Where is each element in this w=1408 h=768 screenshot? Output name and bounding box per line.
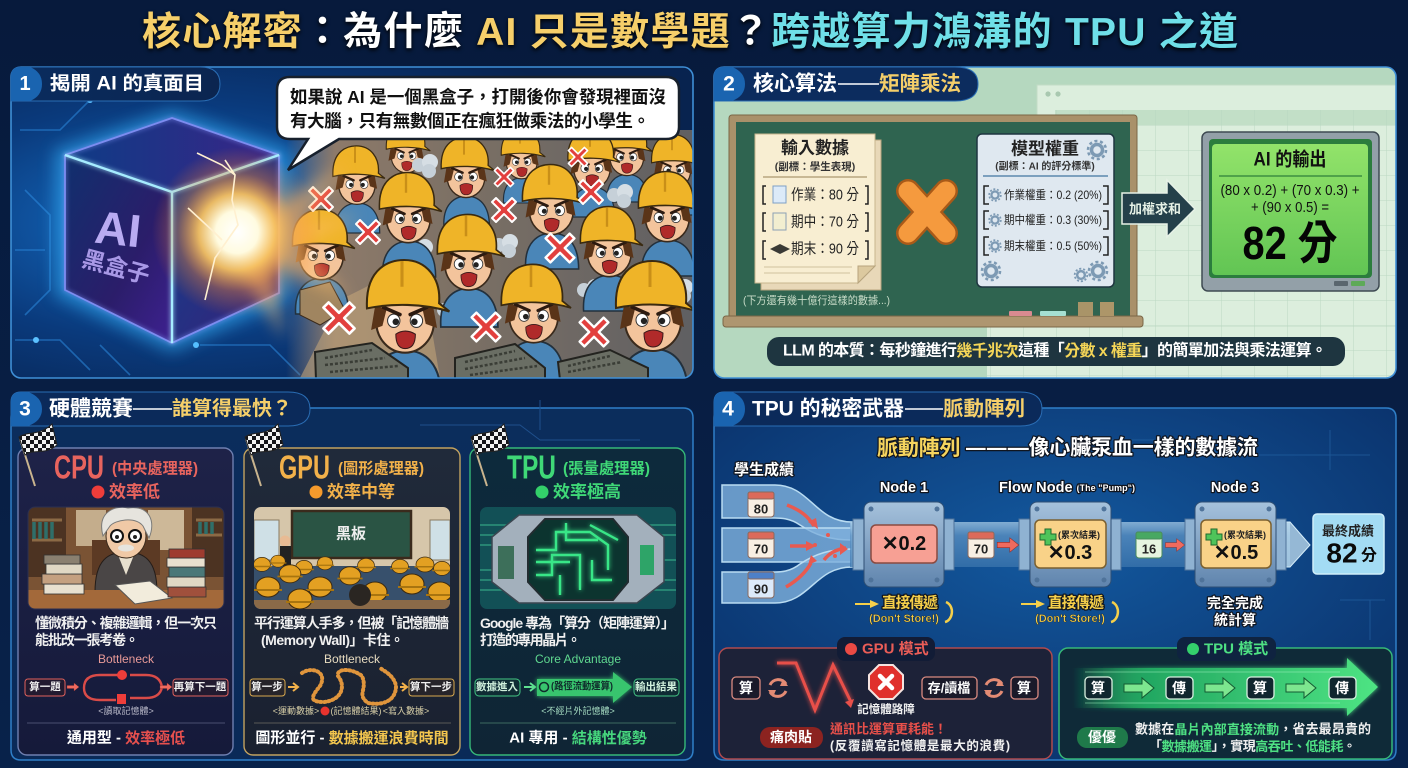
heading: section 3: 誰算得最快？ (172, 396, 292, 420)
card: input data: (副標：學生表現) (775, 160, 855, 173)
card: CPU: 能批改一張考卷。 (35, 632, 139, 648)
card: TPU: 效率極高 (553, 482, 621, 502)
card: GPU: 圖形並行 - 數據搬運浪費時間 (255, 728, 449, 746)
node 1: ✕0.2 (882, 533, 926, 555)
card: model weights: 作業權重：0.2 (20%) (1004, 188, 1102, 202)
card: CPU: 效率低 (109, 482, 160, 502)
chalkboard (723, 115, 1143, 327)
card: CPU: 懂微積分、複雜邏輯，但一次只 (35, 615, 217, 631)
node 1: Node 1 (880, 480, 928, 496)
card: CPU: Bottleneck (98, 652, 155, 666)
flow: CPU bottleneck loop: 算一題 (29, 680, 61, 693)
panel: GPU mode: 通訊比運算更耗能！ (830, 722, 947, 736)
card: model weights (977, 134, 1114, 287)
note: direct pass 1: 直接傳遞 (882, 594, 938, 612)
heading: section 1: 揭開 AI 的真面目 (50, 72, 204, 94)
result box: 82 (1326, 538, 1358, 568)
card: GPU: Bottleneck (324, 652, 381, 666)
node 3: (累次結果) (1224, 529, 1266, 540)
card: GPU: GPU (279, 448, 330, 486)
monitor: AI output (1202, 132, 1379, 291)
chalkboard: (下方還有幾十億行這樣的數據...) (743, 293, 890, 307)
panel 3: hardware race (11, 392, 693, 760)
illustration: TPU chip (480, 507, 676, 609)
flow: GPU bottleneck road: 算下一步 (410, 680, 452, 693)
speech bubble (277, 77, 679, 170)
note: direct pass 1: (Don't Store!) (869, 613, 939, 625)
flow: GPU bottleneck road: <寫入數據> (383, 705, 429, 716)
panel 2: core algorithm (714, 67, 1402, 380)
title: 核心解密：為什麼 AI 只是數學題？跨越算力鴻溝的 TPU 之道 (142, 10, 1238, 54)
connecting pipes: 70 (974, 542, 988, 556)
input pipes: 80 (754, 502, 768, 516)
icon: multiply sign (908, 191, 946, 233)
panel: GPU mode: 算 (1017, 680, 1031, 696)
arrow: weighted sum: 加權求和 (1129, 202, 1181, 216)
heading: section 1 (11, 67, 220, 101)
node 3 (1195, 480, 1276, 587)
glow behind cube (55, 110, 290, 352)
heading: section 2: 2 (723, 72, 735, 96)
card: input data (755, 134, 881, 290)
panel: GPU mode (719, 637, 1052, 759)
glow burst (152, 147, 360, 340)
flow: TPU core advantage (475, 672, 679, 716)
heading: section 3: 硬體競賽 (49, 396, 133, 420)
monitor: AI output: (80 x 0.2) + (70 x 0.3) + (1220, 183, 1360, 199)
panel: TPU mode: TPU 模式 (1204, 640, 1268, 658)
card: model weights: 期末權重：0.5 (50%) (1004, 239, 1102, 253)
illustration: professor (28, 507, 224, 610)
note: direct pass 1 (855, 594, 952, 625)
icon: AI black box cube: AI (92, 201, 144, 257)
heading: section 4: TPU 的秘密武器 (752, 396, 904, 420)
note: direct pass 2: 直接傳遞 (1048, 594, 1104, 612)
input pipes: 90 (754, 582, 768, 596)
panel: TPU mode: 算 (1253, 680, 1267, 696)
node 2: (累次結果) (1058, 529, 1100, 540)
panel 1: reveal the AI black box (11, 67, 701, 398)
heading: section 2: 核心算法 (753, 72, 837, 96)
flow: CPU bottleneck loop: <讀取記憶體> (98, 705, 154, 716)
node 3: ✕0.5 (1214, 542, 1258, 564)
icon: AI black box cube: 黑盒子 (79, 246, 153, 288)
panel: GPU mode: 記憶體路障 (857, 702, 915, 716)
node 2: ✕0.3 (1048, 542, 1092, 564)
connecting pipes: 16 (1142, 542, 1156, 556)
panel: TPU mode: 數據在晶片內部直接流動，省去最昂貴的 (1135, 722, 1371, 736)
heading: section 1: 1 (19, 73, 31, 95)
flow: GPU bottleneck road: (記憶體結果) (330, 705, 382, 716)
flow: CPU bottleneck loop: 再算下一題 (174, 680, 227, 693)
card: input data: 輸入數據 (781, 138, 849, 158)
card: TPU (470, 424, 685, 755)
note: completed (1207, 595, 1263, 628)
flow: GPU bottleneck road: 算一步 (251, 680, 283, 693)
note: completed: 完全完成 (1207, 595, 1263, 611)
connecting pipes (850, 519, 1310, 570)
subtitle: 脈動陣列 ———像心臟泵血一樣的數據流 (877, 436, 1258, 460)
panel: TPU mode: 傳 (1172, 680, 1186, 696)
card: GPU: (Memory Wall)」卡住。 (261, 632, 404, 648)
note: direct pass 2 (1021, 594, 1118, 625)
input pipes (722, 485, 852, 603)
speech bubble: 如果說 AI 是一個黑盒子，打開後你會發現裡面沒 (290, 87, 666, 107)
monitor: AI output: AI 的輸出 (1254, 148, 1326, 170)
panel: GPU mode: 存/讀檔 (928, 680, 970, 696)
card: model weights: (副標：AI 的評分標準) (995, 160, 1095, 172)
callout: LLM essence (767, 337, 1345, 366)
flow: TPU core advantage: 輸出結果 (635, 680, 677, 693)
node 3: Node 3 (1211, 480, 1259, 496)
card: input data: 期末：90 分 (791, 240, 859, 258)
panel: GPU mode: 痛肉貼 (770, 729, 812, 745)
card: CPU: (中央處理器) (112, 460, 198, 478)
note: direct pass 2: (Don't Store!) (1035, 613, 1105, 625)
card: GPU: 平行運算人手多，但被「記憶體牆 (254, 615, 449, 631)
card: CPU (18, 424, 233, 755)
flow: GPU bottleneck road (250, 668, 454, 716)
monitor: AI output: 82 分 (1242, 217, 1338, 269)
red X marks (309, 147, 608, 346)
panel: GPU mode: GPU 模式 (862, 640, 929, 658)
card: GPU: (圖形處理器) (338, 460, 424, 478)
card: model weights: 模型權重 (1011, 140, 1079, 158)
card: GPU: 效率中等 (327, 482, 395, 502)
panel: GPU mode: (反覆讀寫記憶體是最大的浪費) (830, 738, 1010, 753)
result box: 分 (1361, 546, 1377, 564)
monitor: AI output: + (90 x 0.5) = (1251, 200, 1329, 216)
icon: AI black box cube (65, 118, 279, 343)
flow: TPU core advantage: (路徑流動運算) (551, 680, 613, 692)
node 1 (864, 480, 944, 587)
panel: TPU mode: 優優 (1088, 729, 1116, 745)
panel: TPU mode: 傳 (1335, 680, 1349, 696)
speech bubble: 有大腦，只有無數個正在瘋狂做乘法的小學生。 (290, 111, 650, 131)
node 2 (999, 480, 1135, 587)
card: CPU: CPU (54, 448, 104, 486)
card: TPU: TPU (507, 448, 556, 486)
crowd of students (288, 130, 692, 378)
heading: section 3: 3 (19, 398, 31, 420)
panel: TPU mode: 「數據搬運」，實現高吞吐、低能耗。 (1149, 738, 1356, 754)
heading: section 2 (714, 67, 978, 101)
card: TPU: (張量處理器) (563, 460, 650, 478)
card: GPU (244, 424, 460, 755)
heading: section 4: 脈動陣列 (943, 398, 1025, 420)
arrow: weighted sum (1122, 180, 1195, 237)
heading: section 4 (714, 392, 1042, 426)
note: completed: 統計算 (1214, 612, 1256, 628)
card: TPU: 打造的專用晶片。 (480, 632, 581, 648)
node 2: Flow Node (The "Pump") (999, 480, 1135, 496)
card: TPU: Google 專為「算分（矩陣運算）」 (480, 615, 675, 631)
card: TPU: AI 專用 - 結構性優勢 (509, 728, 647, 746)
panel: TPU mode (1059, 637, 1392, 759)
card: input data: 期中：70 分 (791, 214, 859, 230)
flow: CPU bottleneck loop (25, 670, 228, 716)
panel: GPU mode: 算 (739, 680, 753, 696)
card: TPU: Core Advantage (535, 652, 621, 666)
illustration: classroom (252, 507, 454, 609)
flow: GPU bottleneck road: <運動數據> (273, 705, 319, 716)
callout: LLM essence: LLM 的本質：每秒鐘進行幾千兆次這種「分數 x 權重」的簡單加法與乘法運算。 (783, 340, 1327, 360)
illustration: classroom: 黑板 (336, 526, 366, 542)
card: model weights: 期中權重：0.3 (30%) (1004, 212, 1102, 227)
label: student scores: 學生成績 (734, 460, 794, 478)
flow: TPU core advantage: 數據進入 (476, 680, 518, 693)
result box: 最終成績 (1322, 524, 1374, 538)
card: input data: 作業：80 分 (791, 186, 859, 204)
card: CPU: 通用型 - 效率極低 (67, 728, 185, 746)
keyboards (315, 343, 648, 380)
result box (1313, 514, 1384, 574)
heading: section 3 (11, 392, 310, 426)
panel 4: systolic array (714, 392, 1396, 760)
heading: section 4: 4 (722, 398, 734, 420)
input pipes: 70 (754, 542, 768, 556)
flow: TPU core advantage: <不經片外記憶體> (541, 705, 615, 716)
panel: TPU mode: 算 (1091, 680, 1105, 696)
heading: section 2: 矩陣乘法 (879, 72, 961, 96)
